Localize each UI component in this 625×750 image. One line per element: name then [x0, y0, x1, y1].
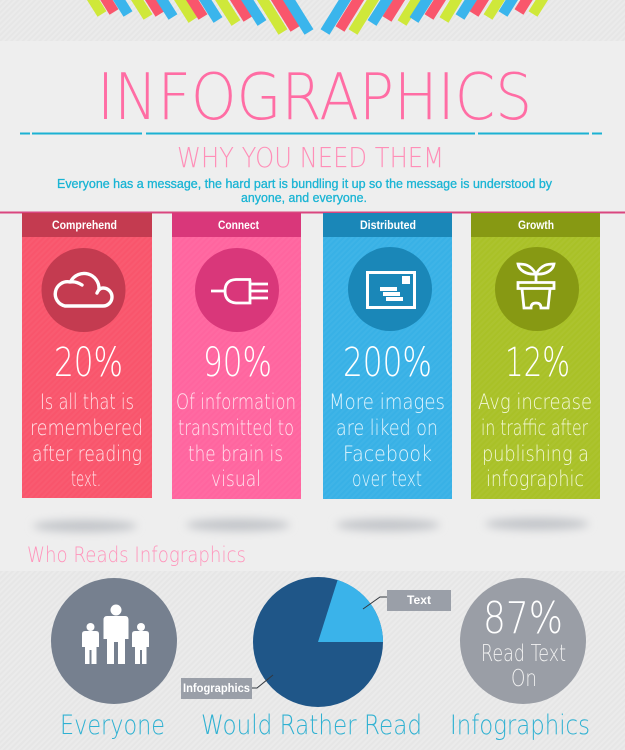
icon circle: [42, 248, 126, 332]
description: are liked on: [336, 416, 438, 440]
callout: infographics: Infographics: [183, 681, 250, 695]
description: Of information: [176, 390, 296, 414]
card body: [172, 213, 301, 499]
stat: 200%: [343, 340, 432, 386]
card body: [471, 213, 600, 499]
panel: connect: [172, 213, 301, 499]
description: the brain is: [188, 442, 283, 466]
description: transmitted to: [178, 416, 294, 440]
description: [329, 390, 445, 491]
circle: 87%: Read Text: [481, 641, 566, 667]
description: over text: [352, 467, 422, 491]
intro text: [57, 176, 552, 205]
card header: [471, 213, 600, 237]
icon: cloud: [55, 273, 112, 306]
subtitle heading: WHY YOU NEED THEM: [177, 141, 444, 174]
panel: distributed: Distributed: [360, 220, 416, 232]
panel: growth: [471, 213, 600, 499]
description: visual: [211, 467, 261, 491]
circle: everyone: [51, 578, 177, 704]
stat: 20%: [54, 340, 123, 386]
cyan divider: [20, 132, 602, 134]
icon circle: [195, 248, 279, 332]
description: text.: [71, 467, 101, 491]
stat: 90%: [203, 340, 272, 386]
icon: plant pot: [518, 264, 554, 308]
pink rule: [0, 212, 625, 214]
description: publishing a: [482, 442, 589, 466]
description: [176, 390, 296, 491]
icon: people: [82, 604, 149, 664]
panel: growth: Growth: [518, 220, 554, 232]
description: [478, 390, 592, 491]
card header: [323, 213, 452, 237]
description: after reading: [32, 442, 142, 466]
circle: 87%: [460, 578, 586, 704]
card drop shadows: [33, 518, 589, 532]
caption: infographics: Infographics: [450, 710, 590, 741]
caption: everyone: Everyone: [60, 710, 165, 741]
description: in traffic after: [481, 416, 588, 440]
card body: [22, 213, 152, 498]
description: [30, 390, 143, 491]
stat: 12%: [505, 340, 570, 386]
top chevron ribbons: [85, 0, 550, 32]
caption: would rather read: Would Rather Read: [201, 710, 422, 741]
icon: postcard: [368, 272, 414, 308]
panel: comprehend: Comprehend: [52, 220, 117, 232]
intro text: Everyone has a message, the hard part is bundling it up so the message is understood by: [57, 176, 552, 191]
description: infographic: [486, 467, 584, 491]
circle: 87%: On: [511, 666, 537, 692]
icon: plug: [211, 280, 268, 303]
description: Is all that is: [40, 390, 134, 414]
description: More images: [329, 390, 445, 414]
card header: [22, 213, 152, 237]
circle: 87%: 87%: [483, 593, 563, 644]
panel: comprehend: [22, 213, 152, 498]
title: INFOGRAPHICS: [97, 61, 532, 135]
panel: connect: Connect: [218, 220, 259, 232]
callout: text: Text: [407, 593, 431, 607]
description: Facebook: [343, 442, 432, 466]
section heading: Who Reads Infographics: [27, 543, 246, 567]
pie chart: [181, 577, 451, 707]
card header: [172, 213, 301, 237]
icon circle: [348, 247, 432, 331]
card body: [323, 213, 452, 499]
icon circle: [495, 247, 579, 331]
callout: text: [363, 590, 451, 611]
callout: infographics: [181, 675, 273, 699]
panel: distributed: [323, 213, 452, 499]
intro text: anyone, and everyone.: [241, 190, 367, 205]
description: Avg increase: [478, 390, 592, 414]
description: remembered: [30, 416, 143, 440]
